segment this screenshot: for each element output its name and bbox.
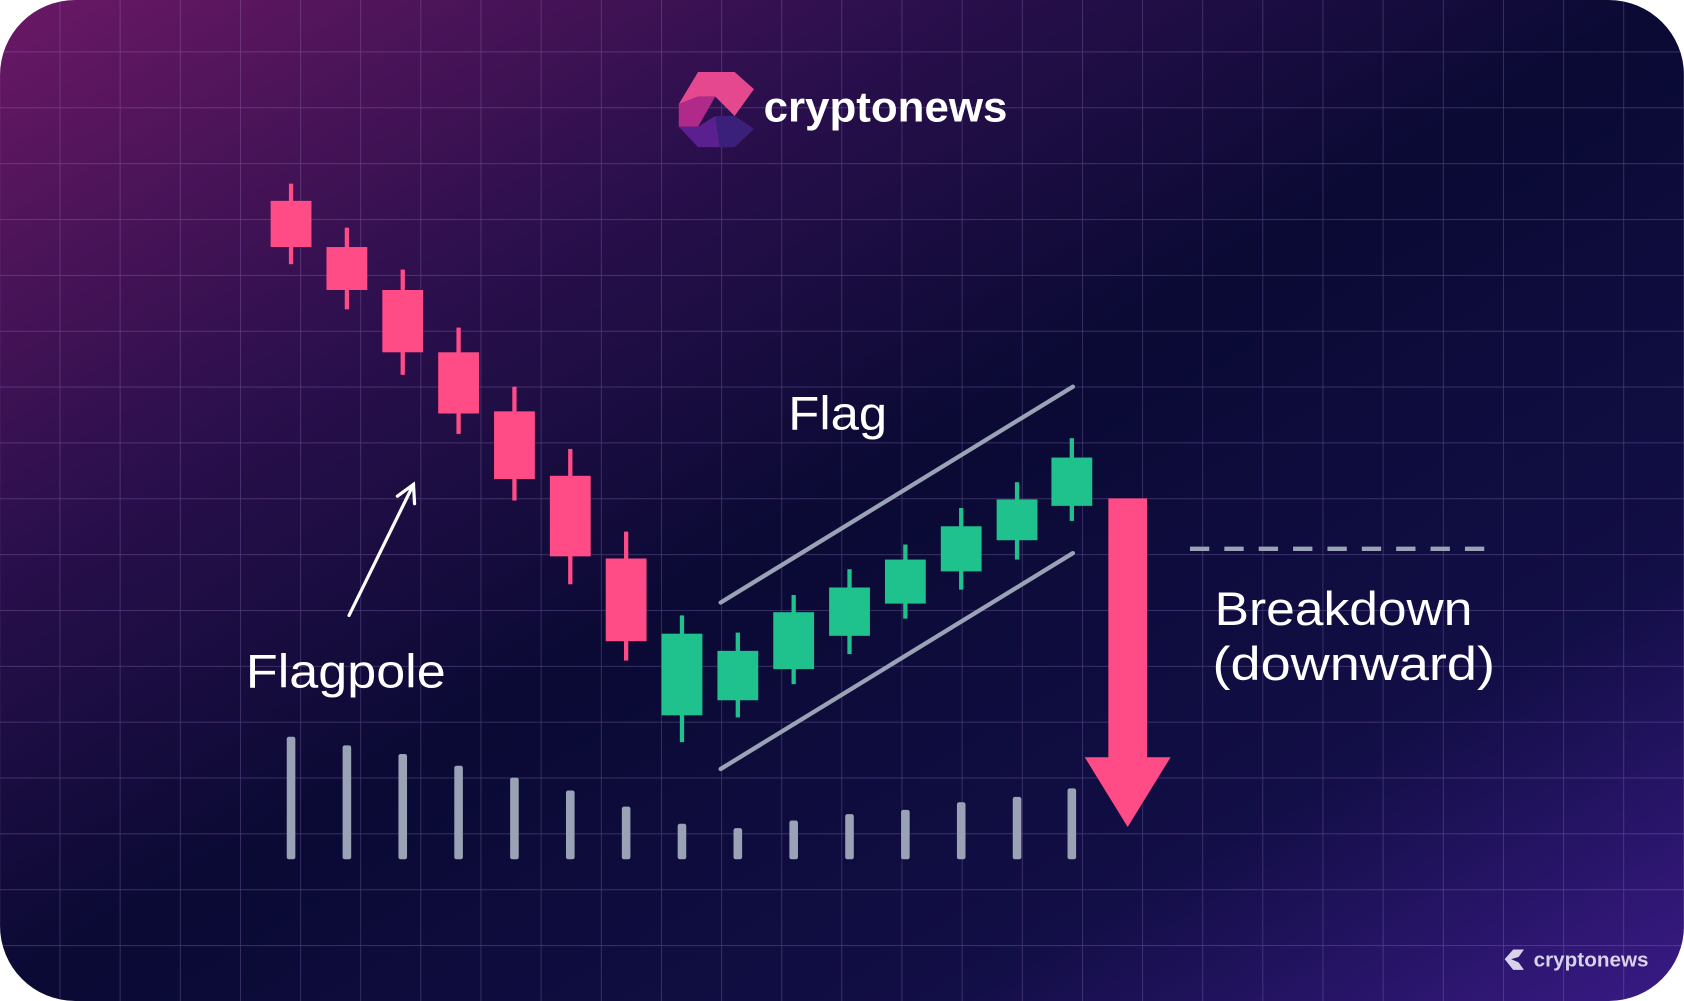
volume bars	[287, 737, 1076, 859]
label: Breakdown (downward): Breakdown	[1215, 583, 1472, 636]
arrow: flagpole pointer	[349, 484, 415, 615]
flag channel lines	[721, 387, 1073, 769]
logo: cryptonews: cryptonews	[764, 83, 1007, 131]
arrow: breakdown	[1085, 498, 1171, 827]
green candles: flag	[662, 438, 1092, 742]
label: Flagpole: Flagpole	[246, 645, 446, 698]
red candles: flagpole	[271, 184, 647, 661]
dashed breakdown level	[1190, 547, 1484, 551]
logo: cryptonews	[679, 72, 1007, 147]
watermark logo: cryptonews	[1534, 950, 1649, 972]
label: Breakdown (downward): (downward)	[1213, 638, 1495, 691]
label: Flag: Flag	[788, 388, 887, 441]
